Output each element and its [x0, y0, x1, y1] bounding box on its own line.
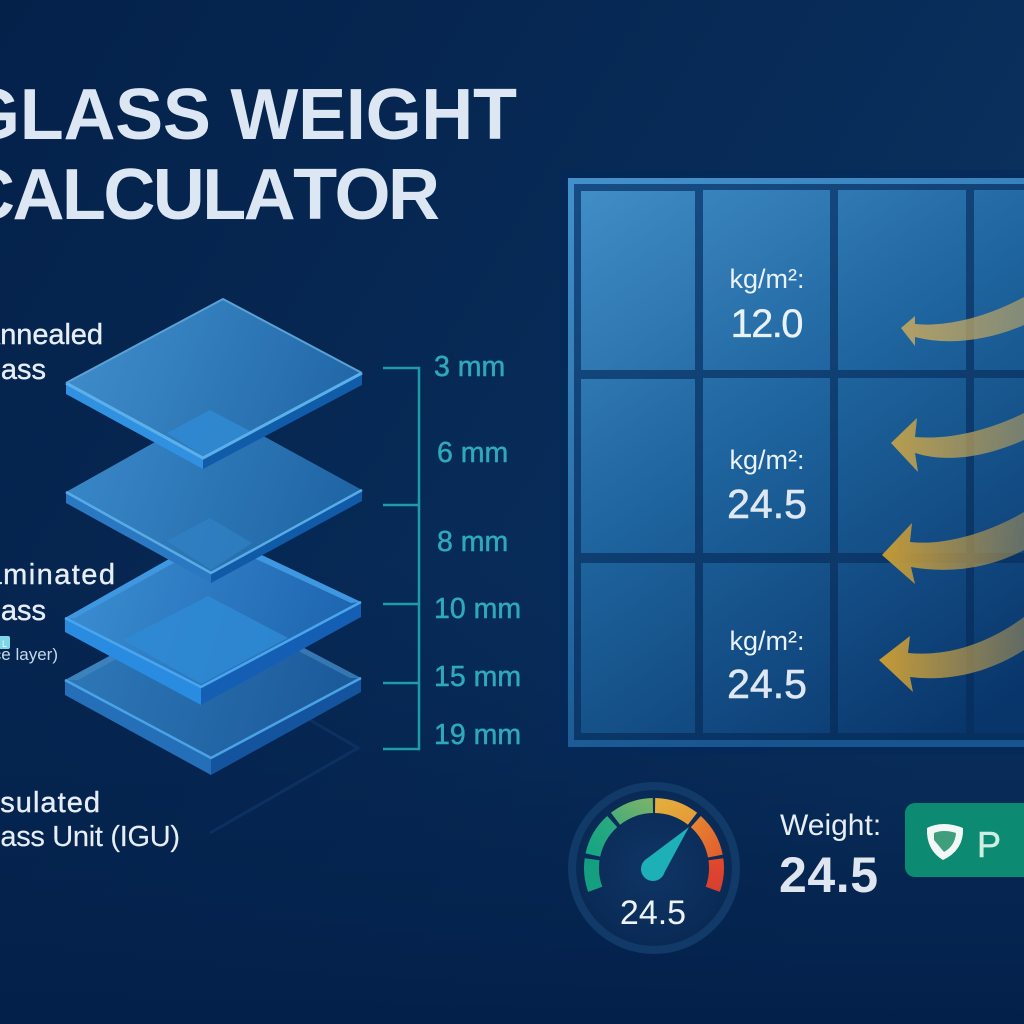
gauge needle	[641, 827, 689, 881]
pass badge	[905, 803, 1024, 877]
panel: window grid	[560, 170, 1024, 755]
thickness labels: 3 mm	[434, 351, 505, 383]
pane value: 24.5 bottom	[727, 626, 807, 707]
thickness labels: 6 mm	[437, 437, 508, 469]
weight readout	[779, 809, 881, 903]
icon: shield	[927, 824, 963, 860]
thickness labels: 8 mm	[437, 526, 508, 558]
glass plate 4 (insulated)	[65, 600, 361, 775]
label: insulated glass unit	[0, 787, 180, 853]
thickness bracket	[383, 368, 419, 749]
pane value: 12.0	[729, 264, 805, 346]
pane value: 24.5 middle	[727, 445, 807, 527]
arrow 2	[891, 413, 1024, 472]
title	[0, 75, 517, 235]
label: laminated glass	[0, 559, 115, 664]
icon: laminate chip	[0, 636, 10, 649]
arrow 4	[879, 617, 1024, 692]
icon: laminate chip: L	[2, 639, 7, 649]
window panes	[581, 190, 1024, 733]
pane value: 12.0: 12.0	[730, 302, 804, 346]
gauge value: 24.5	[620, 894, 686, 932]
label: annealed glass	[0, 319, 103, 386]
glass plate 2	[66, 409, 362, 583]
arrow 1	[901, 297, 1024, 346]
gauge segments	[584, 798, 724, 892]
pane value: 24.5 bottom: 24.5	[727, 661, 807, 707]
pane value: 12.0: kg/m²:	[729, 264, 805, 294]
arrow 3	[882, 512, 1024, 584]
thickness labels	[434, 351, 521, 751]
laminate interlayer highlight	[123, 596, 288, 684]
thickness labels: 15 mm	[434, 661, 521, 693]
thickness labels: 19 mm	[434, 719, 521, 751]
glass plate 1 (annealed)	[66, 299, 362, 469]
pane value: 24.5 middle: kg/m²:	[729, 445, 805, 475]
thickness labels: 10 mm	[434, 593, 521, 625]
ghost plate outline	[210, 720, 358, 833]
gauge	[568, 782, 740, 954]
stacked glass layers illustration	[65, 299, 362, 833]
gauge dial	[568, 782, 740, 954]
pane value: 24.5 bottom: kg/m²:	[729, 626, 805, 656]
glass plate 3 (laminated)	[65, 533, 361, 705]
weight readout: 24.5	[779, 847, 878, 903]
pane value: 24.5 middle: 24.5	[727, 481, 807, 527]
weight readout: Weight:	[780, 809, 881, 842]
pass badge: P	[977, 824, 1001, 865]
